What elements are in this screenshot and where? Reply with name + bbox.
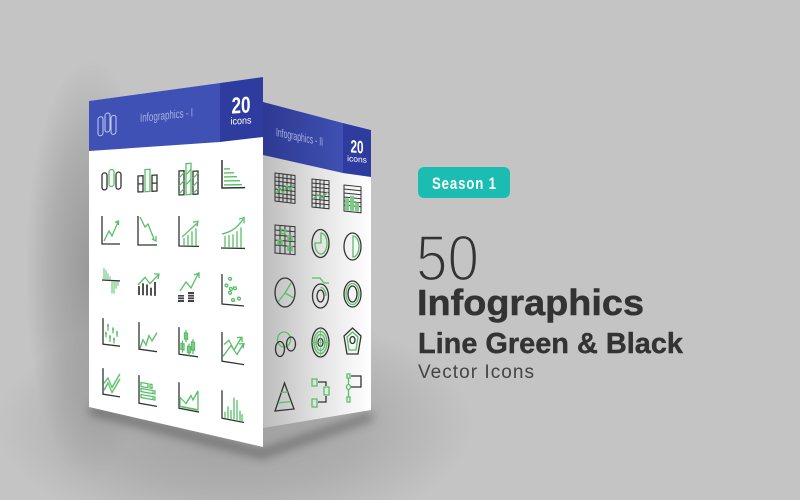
panel: right booklet page bbox=[263, 102, 371, 428]
right page count tab bbox=[343, 123, 371, 177]
count: 20 icons: 20 bbox=[350, 136, 364, 158]
icon: box flow bbox=[312, 379, 329, 407]
icon: coins with arrow bbox=[178, 273, 199, 302]
icon: three column bars bbox=[138, 169, 157, 192]
icon: up and down bars bbox=[102, 268, 120, 294]
icon: rising line chart bbox=[102, 216, 120, 244]
icon: candlestick small bbox=[103, 318, 120, 346]
icon: layered pyramid bbox=[275, 383, 294, 411]
left page body bbox=[89, 77, 263, 447]
icon: two crossing arrows bbox=[222, 332, 244, 365]
count: 20 icons bbox=[230, 91, 252, 128]
count: 20 icons: 20 bbox=[232, 91, 250, 119]
icon: pie segments bbox=[275, 278, 295, 307]
right page body bbox=[263, 102, 371, 428]
count: 20 icons: icons bbox=[230, 115, 252, 128]
icon: bars with arrow bbox=[179, 216, 199, 246]
title: Infographics: Infographics bbox=[417, 282, 644, 323]
icon: radar target bbox=[312, 328, 329, 357]
icon: descending bar chart bbox=[222, 160, 245, 188]
icon: grid with curve bbox=[312, 179, 329, 209]
left page count tab bbox=[220, 77, 263, 142]
icon: bars under rising curve bbox=[221, 217, 245, 248]
icon: vertical node flow bbox=[346, 374, 361, 402]
icon: ring bbox=[344, 281, 361, 307]
icon: zigzag line chart bbox=[139, 322, 157, 352]
icon: candlesticks bbox=[179, 327, 198, 357]
icon: thin column chart bbox=[222, 390, 244, 422]
icon: horizontal bars bbox=[139, 375, 157, 406]
icon: gray bars with arrow bbox=[138, 273, 159, 296]
icon: triple zigzag bbox=[103, 368, 120, 397]
icon: header cylinders bbox=[98, 112, 116, 136]
badge: Season 1 bbox=[418, 167, 510, 198]
icon: hatched column bars bbox=[179, 163, 198, 195]
count: 20 icons: icons bbox=[347, 153, 367, 165]
icon: half circle bbox=[344, 233, 361, 260]
icon: cylinders bbox=[102, 169, 121, 190]
icon: scatter plot bbox=[222, 274, 244, 306]
count: 20 icons bbox=[347, 136, 367, 165]
icon: pentagon radar bbox=[344, 328, 361, 354]
title number: 50: 50 bbox=[416, 222, 479, 294]
icon: grid with scatter boxes bbox=[275, 225, 295, 255]
icon: falling line chart bbox=[138, 216, 157, 245]
panel: left booklet page bbox=[89, 77, 263, 447]
right page header band bbox=[263, 102, 343, 173]
icon: grid with green line bbox=[275, 173, 295, 203]
left page header band bbox=[89, 83, 220, 151]
heading: Infographics - I: Infographics - I bbox=[140, 105, 193, 125]
badge: Season 1: Season 1 bbox=[432, 175, 496, 193]
icon: concentric ring with tab bbox=[312, 278, 329, 308]
subtitle: Line Green & Black: Line Green & Black bbox=[418, 328, 683, 360]
icon: pie circle bbox=[312, 230, 329, 258]
icon: overlapping circles bbox=[276, 332, 296, 356]
icon: grid with bars bbox=[344, 185, 361, 213]
heading: Infographics - II: Infographics - II bbox=[276, 125, 323, 149]
icon: area chart bbox=[179, 382, 199, 412]
caption: Vector Icons: Vector Icons bbox=[418, 362, 534, 383]
